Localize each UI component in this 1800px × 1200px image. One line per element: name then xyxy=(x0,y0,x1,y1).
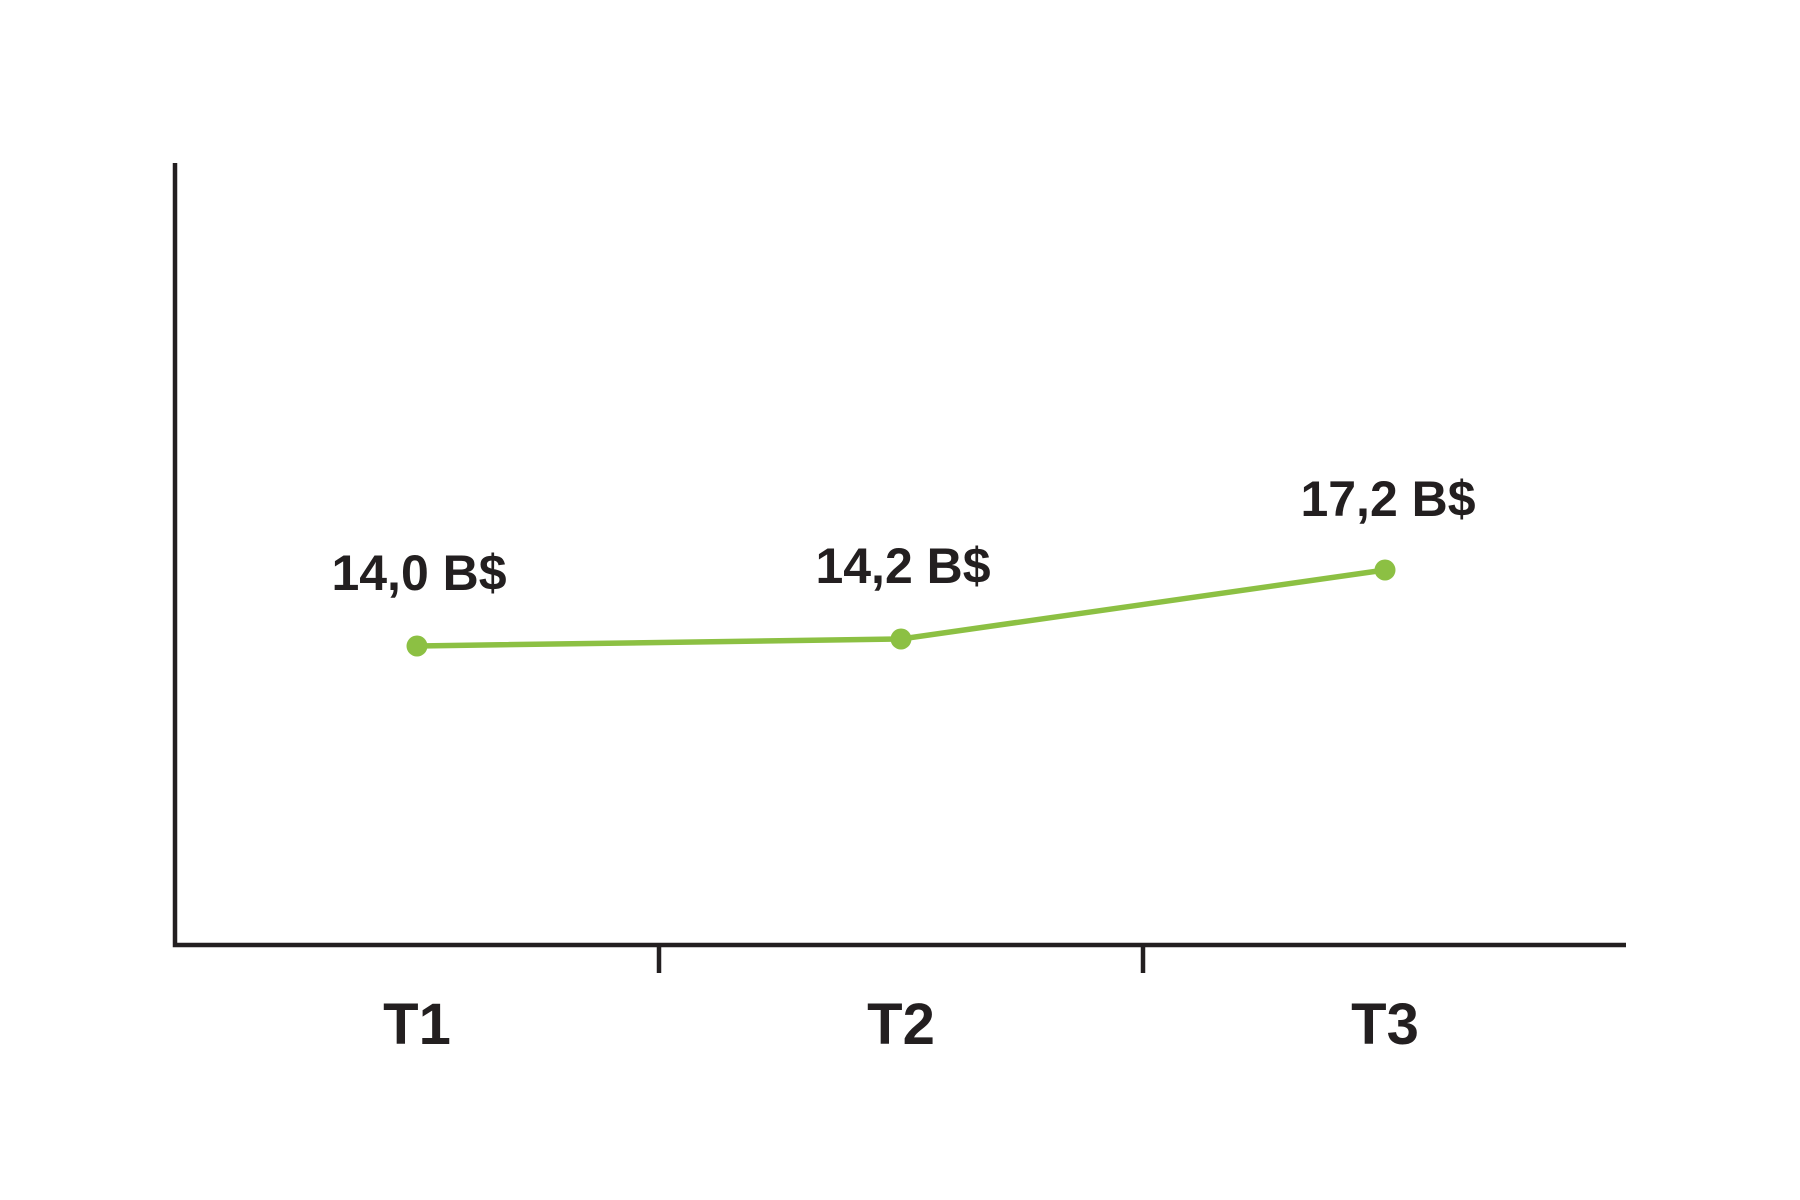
x-axis labels: T3 xyxy=(1351,992,1419,1057)
data line xyxy=(406,560,1396,656)
x-axis labels: T2 xyxy=(867,992,935,1057)
data labels xyxy=(331,471,1476,601)
x-axis labels xyxy=(383,992,1419,1057)
data labels: 17,2 B$ xyxy=(1300,471,1476,527)
data labels: 14,2 B$ xyxy=(815,538,991,594)
axes xyxy=(175,163,1626,973)
x-axis labels: T1 xyxy=(383,992,451,1057)
data labels: 14,0 B$ xyxy=(331,545,507,601)
